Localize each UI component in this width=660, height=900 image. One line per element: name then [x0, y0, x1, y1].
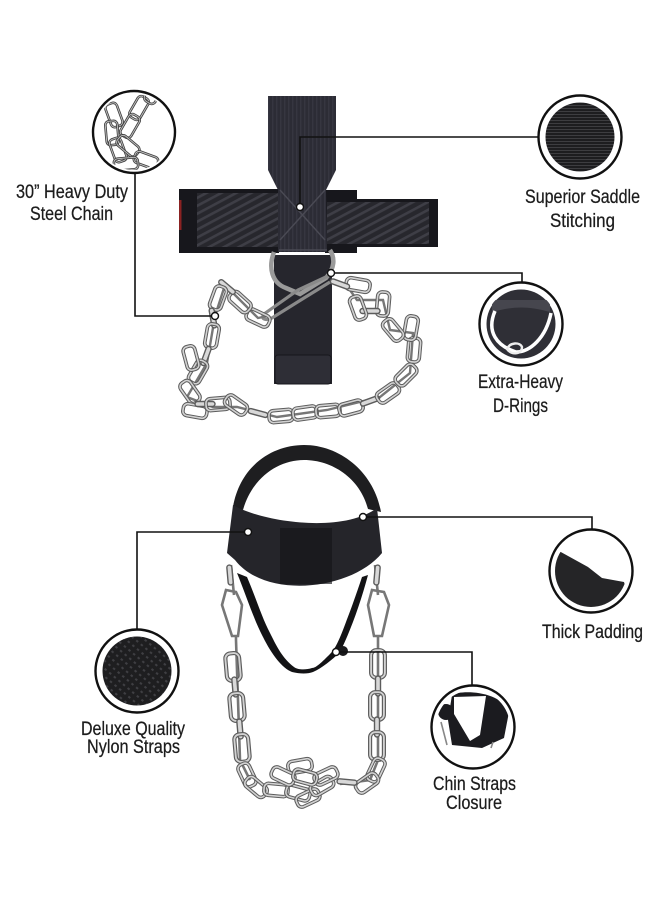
upper vertical strap	[268, 96, 336, 252]
label: steel chain: 30” Heavy Duty	[16, 182, 128, 203]
icon: saddle stitching detail	[538, 96, 622, 178]
callout line: chin straps	[336, 652, 472, 686]
lower vertical strap	[274, 255, 332, 384]
callout dots	[212, 204, 366, 656]
label: nylon straps	[81, 719, 185, 758]
label: nylon straps: Deluxe Quality	[81, 719, 185, 740]
icon: steel chain detail	[93, 79, 175, 173]
right strap	[325, 190, 438, 253]
callout line: D-rings	[331, 273, 522, 283]
head arc	[233, 445, 381, 512]
callout line: saddle stitching	[300, 137, 540, 207]
label: steel chain: Steel Chain	[30, 204, 113, 225]
left chain	[222, 565, 335, 809]
label: thick padding: Thick Padding	[542, 622, 643, 643]
cross stitching	[279, 190, 327, 250]
label: D-rings	[478, 372, 563, 417]
label: saddle stitching: Superior Saddle	[525, 187, 640, 208]
label: nylon straps: Nylon Straps	[87, 737, 180, 758]
label: chin straps: Chin Straps	[433, 774, 516, 795]
callout line: steel chain	[135, 172, 215, 316]
label: chin straps	[433, 774, 516, 814]
label: D-rings: Extra-Heavy	[478, 372, 563, 393]
product: head harness	[222, 445, 389, 809]
carabiner	[263, 276, 330, 319]
chin strap	[237, 573, 368, 674]
label: steel chain	[16, 182, 128, 225]
right chain	[270, 565, 389, 795]
label: D-rings: D-Rings	[493, 396, 548, 417]
label: saddle stitching: Stitching	[550, 211, 615, 232]
chain	[178, 277, 421, 423]
head band	[227, 505, 382, 586]
callout line: thick padding	[363, 517, 592, 530]
label: saddle stitching	[525, 187, 640, 232]
left strap	[179, 189, 282, 253]
icon: thick padding detail	[545, 530, 635, 620]
icon: chin straps detail	[432, 686, 514, 768]
product: dip belt cross strap	[178, 96, 438, 423]
callout line: nylon straps	[137, 532, 248, 631]
label: chin straps: Closure	[446, 793, 502, 814]
clasp	[338, 646, 348, 656]
icon: nylon straps detail	[96, 630, 178, 712]
D-ring	[271, 250, 333, 294]
icon: D-ring detail	[480, 282, 562, 366]
